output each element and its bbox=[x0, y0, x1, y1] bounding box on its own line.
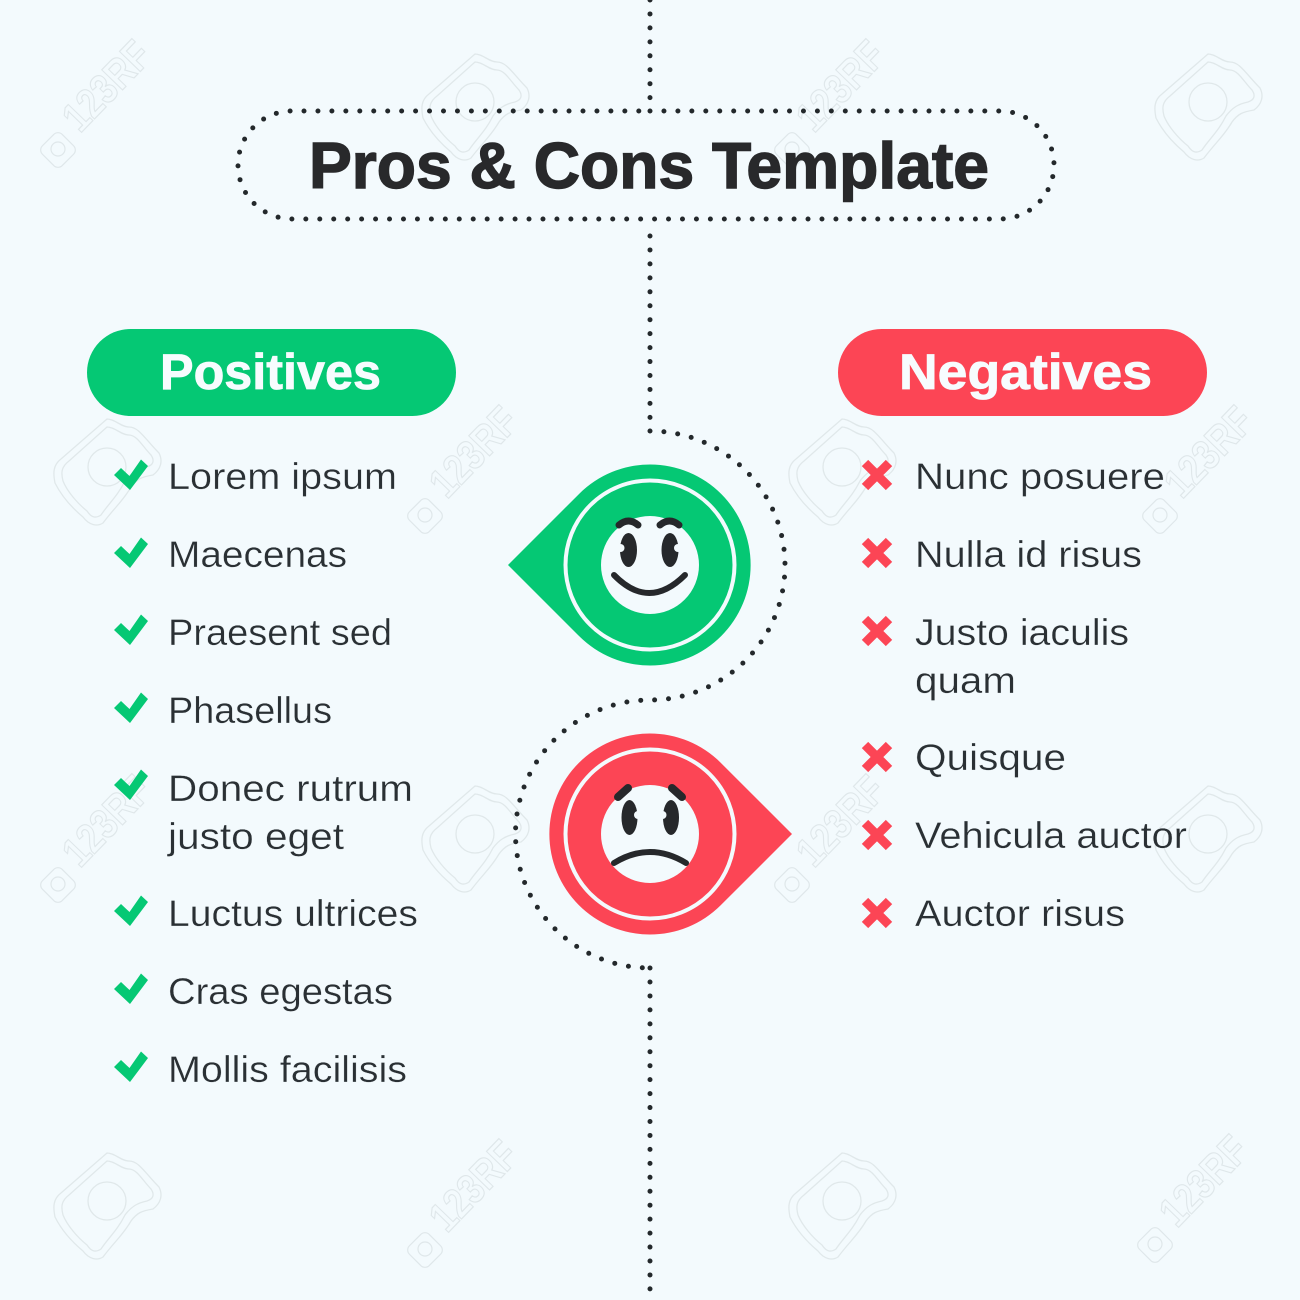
icon: sad face pin bbox=[549, 734, 792, 934]
text: 123RF bbox=[420, 1131, 527, 1240]
item: Donec rutrum justo eget: Donec rutrum bbox=[168, 768, 413, 809]
item: Nunc posuere: Nunc posuere bbox=[915, 456, 1165, 497]
item: Phasellus: Phasellus bbox=[168, 690, 332, 731]
item: Maecenas: Maecenas bbox=[168, 534, 347, 575]
text: 123RF bbox=[53, 31, 160, 140]
dotted centre connector bbox=[516, 0, 785, 1300]
text: 123RF bbox=[787, 31, 894, 140]
panel: positives bbox=[87, 329, 456, 1090]
item: Quisque: Quisque bbox=[915, 737, 1066, 778]
item: Praesent sed: Praesent sed bbox=[168, 612, 392, 653]
heading: negatives bbox=[838, 329, 1207, 416]
item: Lorem ipsum: Lorem ipsum bbox=[168, 456, 397, 497]
text: 123RF bbox=[787, 766, 894, 875]
item: Auctor risus: Auctor risus bbox=[915, 893, 1125, 934]
item: Justo iaculis quam: quam bbox=[915, 660, 1016, 701]
heading: positives bbox=[87, 329, 456, 416]
text: 123RF bbox=[1155, 397, 1262, 506]
item: Cras egestas: Cras egestas bbox=[168, 971, 393, 1012]
item: Nulla id risus: Nulla id risus bbox=[915, 534, 1142, 575]
text: 123RF bbox=[420, 397, 527, 506]
text: 123RF bbox=[1150, 1126, 1257, 1235]
title: Pros & Cons Template bbox=[309, 129, 989, 202]
list: positives bbox=[114, 456, 418, 1090]
item: Justo iaculis quam: Justo iaculis bbox=[915, 612, 1129, 653]
item: Luctus ultrices: Luctus ultrices bbox=[168, 893, 418, 934]
item: Quisque bbox=[865, 737, 1066, 778]
item: Donec rutrum justo eget bbox=[114, 768, 413, 857]
item: Justo iaculis quam bbox=[865, 612, 1129, 701]
item: Vehicula auctor: Vehicula auctor bbox=[915, 815, 1187, 856]
item: Mollis facilisis: Mollis facilisis bbox=[168, 1049, 407, 1090]
icon: happy face pin bbox=[508, 464, 751, 666]
heading: positives: Positives bbox=[160, 344, 381, 400]
panel: negatives bbox=[838, 329, 1207, 934]
item: Donec rutrum justo eget: justo eget bbox=[167, 816, 345, 857]
title bbox=[238, 111, 1054, 219]
list: negatives bbox=[865, 456, 1187, 934]
text: 123RF bbox=[53, 766, 160, 875]
heading: negatives: Negatives bbox=[899, 344, 1152, 400]
